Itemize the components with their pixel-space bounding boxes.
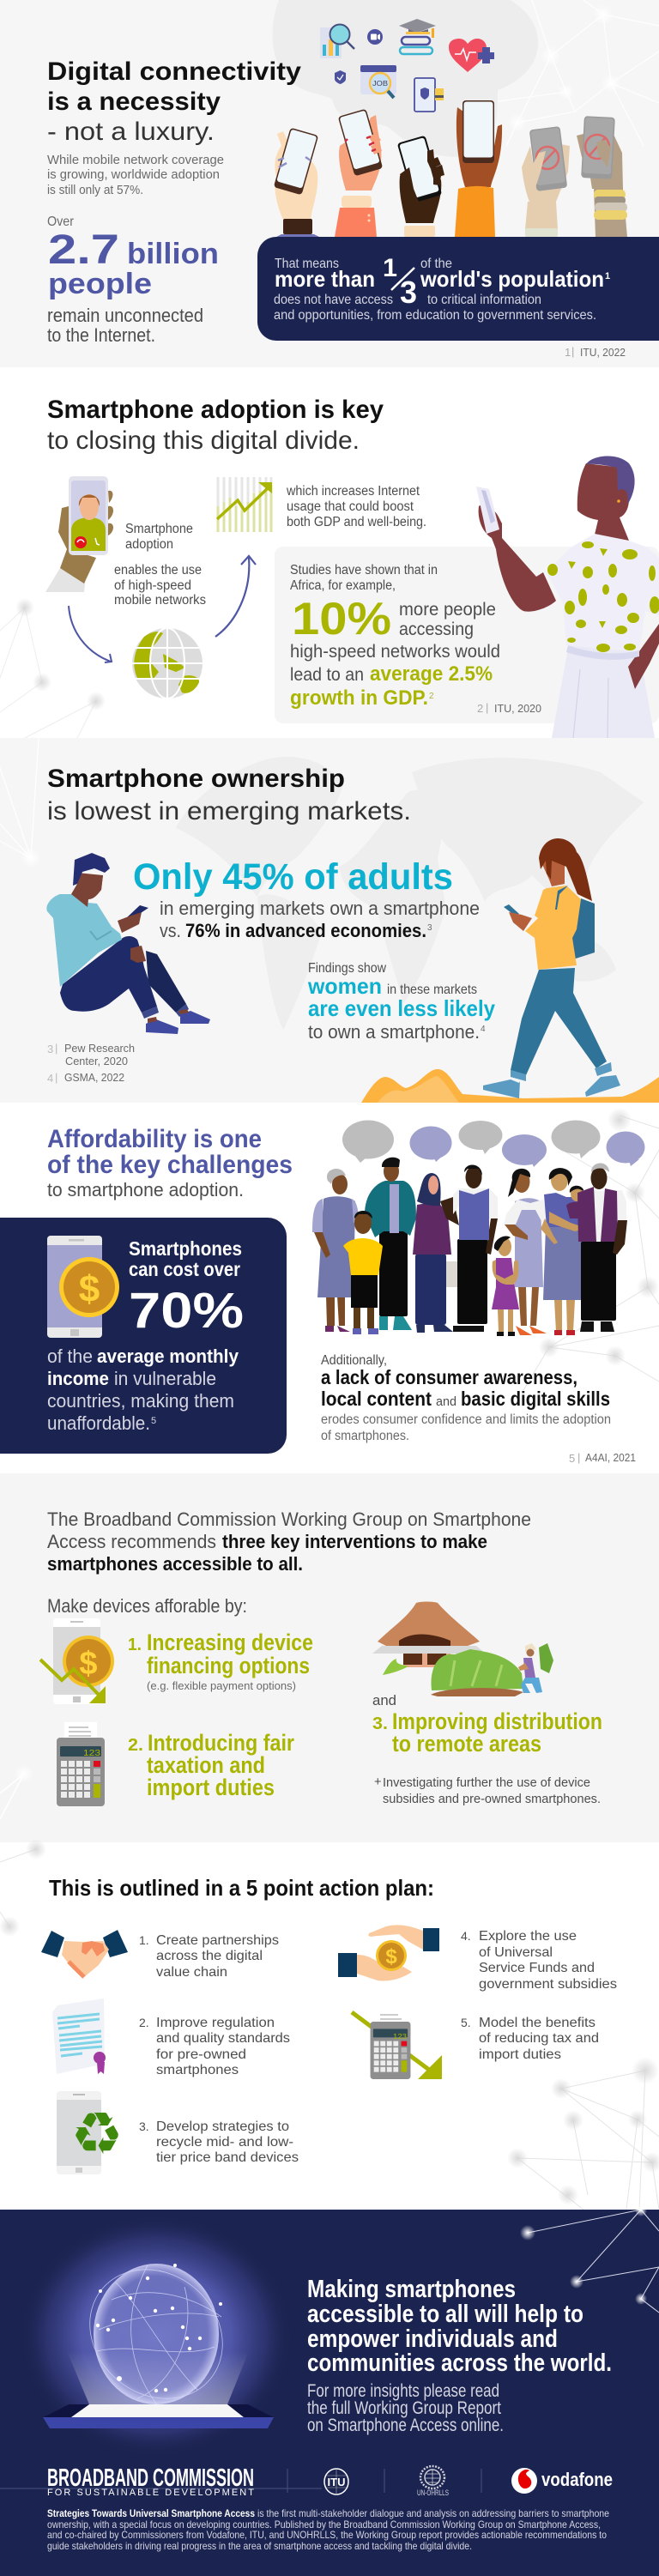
speech bubbles	[342, 1121, 645, 1167]
item: tax modelling: of reducing tax and	[479, 2031, 599, 2046]
callout: one third of the world: That means	[275, 257, 339, 271]
item 3: distribution	[372, 1692, 602, 1757]
item 1: device financing: financing options	[147, 1653, 310, 1678]
callout: one third of the world	[257, 237, 659, 341]
item 3: distribution: to remote areas	[392, 1731, 541, 1757]
source: A4AI 2021: |	[577, 1451, 580, 1464]
text: lack of awareness: of smartphones.	[321, 1429, 409, 1443]
icon: job search: JOB	[372, 79, 388, 88]
item: recycling: 3.	[139, 2119, 149, 2133]
text: emerging markets: vs.	[160, 920, 181, 941]
person: woman holding baby	[541, 1168, 592, 1335]
text: report description	[47, 2507, 609, 2552]
item: partnerships	[139, 1933, 279, 1980]
panel: studies in Africa: high-speed networks would	[290, 641, 500, 662]
stat: 2.7 billion people	[47, 215, 219, 346]
icon: books and graduation cap	[399, 19, 436, 54]
text: report description: is the first multi-stakeholder dialogue and analysis on addressing barriers to smartphone	[257, 2507, 609, 2519]
logo: UN-OHRLLS	[417, 2466, 449, 2497]
icon: chart magnifier	[320, 24, 354, 58]
text: more insights	[307, 2381, 504, 2435]
icon: shield	[335, 70, 346, 84]
icon: handshake	[41, 1930, 128, 1977]
text: smartphone adoption: Smartphone	[125, 522, 193, 536]
logo: Vodafone	[511, 2468, 613, 2494]
heading: affordability	[47, 1125, 293, 1200]
stat: only 45 percent: Only 45% of adults	[133, 856, 453, 898]
text: emerging markets	[160, 898, 480, 941]
heading: call to action: Making smartphones	[307, 2276, 516, 2303]
icon: phone coin down arrow	[40, 1618, 114, 1704]
panel: studies in Africa: |	[486, 701, 488, 714]
callout: 70 percent of income: can cost over	[129, 1258, 240, 1280]
sources: Pew and GSMA: Pew Research	[64, 1042, 135, 1055]
icon: globe	[132, 628, 203, 698]
heading: affordability: Affordability is one	[47, 1125, 262, 1153]
item 1: device financing: Increasing device	[147, 1630, 313, 1655]
item: partnerships: Create partnerships	[156, 1933, 279, 1948]
callout: 70 percent of income: Smartphones	[129, 1237, 242, 1260]
item: regulation	[139, 2016, 290, 2077]
item: recycling	[139, 2119, 299, 2165]
text: women less likely: to own a smartphone.	[308, 1021, 480, 1043]
sources: Pew and GSMA: Center, 2020	[65, 1055, 128, 1067]
text: women less likely: are even less likely	[308, 995, 495, 1021]
text: coverage: is growing, worldwide adoption	[47, 167, 220, 182]
item: tax modelling: 5.	[461, 2016, 471, 2029]
text: women less likely: 4	[481, 1025, 486, 1034]
logo: UN-OHRLLS: UN-OHRLLS	[417, 2488, 449, 2497]
person: blue vest man	[440, 1164, 498, 1332]
heading: affordability: of the key challenges	[47, 1151, 293, 1179]
stat: 10 percent: 10%	[292, 594, 391, 644]
heading: smartphone adoption	[47, 396, 384, 455]
item: tax modelling: import duties	[479, 2047, 561, 2062]
network lines	[0, 1774, 24, 1819]
text: women less likely: in these markets	[387, 983, 477, 997]
text: enables high-speed networks: mobile networks	[114, 593, 206, 608]
heading: digital connectivity: is a necessity	[47, 88, 221, 116]
callout: one third of the world: world's population	[420, 266, 604, 292]
panel: studies in Africa: ITU, 2020	[494, 702, 541, 715]
item: tax modelling: Model the benefits	[479, 2016, 596, 2030]
panel: three key interventions	[0, 1473, 659, 1842]
illustration: village hut and farmer	[372, 1601, 553, 1696]
item 2: fair taxation: Introducing fair	[148, 1730, 294, 1756]
callout: one third of the world: more than	[275, 266, 375, 292]
icon: job search	[360, 65, 396, 98]
arrow: globe to chart	[215, 556, 256, 637]
arrow: phone to globe	[69, 606, 112, 662]
text: smartphone adoption: adoption	[125, 537, 173, 552]
text: subsidies: subsidies and pre-owned smartphones.	[383, 1793, 601, 1806]
illustration: glowing globe over phone	[19, 2214, 293, 2458]
logo: Broadband Commission: BROADBAND COMMISSION	[47, 2464, 254, 2492]
text: enables high-speed networks: enables the use	[114, 563, 202, 577]
panel: smartphone ownership	[0, 738, 659, 1103]
icon: phone coin down arrow: $	[79, 1646, 98, 1682]
panel: smartphone adoption	[0, 367, 659, 751]
panel: affordability	[0, 1103, 659, 1473]
item: regulation: for pre-owned	[156, 2047, 246, 2062]
source: ITU 2022	[565, 345, 626, 359]
panel: studies in Africa: lead to an	[290, 664, 364, 685]
person: yellow shirt boy	[343, 1211, 383, 1334]
icon: phone with coin	[47, 1236, 119, 1338]
callout: 70 percent of income: income	[47, 1368, 109, 1389]
icon: phone video call in hand	[45, 476, 113, 592]
callout: 70 percent of income: countries, making them	[47, 1390, 234, 1412]
icon: calculator: 123	[83, 1749, 101, 1758]
callout: one third of the world: 3	[400, 275, 417, 310]
item: regulation: and quality standards	[156, 2031, 290, 2046]
network lines	[0, 1849, 659, 2210]
sources: Pew and GSMA: 3	[47, 1043, 53, 1055]
sources: Pew and GSMA: 4	[47, 1072, 53, 1085]
source: ITU 2022: 1	[565, 346, 571, 359]
text: lack of awareness: basic digital skills	[461, 1388, 610, 1410]
heading: digital connectivity	[47, 57, 301, 146]
text: internet usage: which increases Internet	[286, 484, 420, 499]
callout: 70 percent of income: of the	[47, 1345, 93, 1367]
logo: ITU: ITU	[328, 2476, 345, 2488]
illustration: walking woman	[483, 838, 620, 1098]
item 2: fair taxation: import duties	[147, 1775, 275, 1800]
callout: 70 percent of income	[0, 1218, 287, 1454]
callout: 70 percent of income: unaffordable.	[47, 1412, 150, 1434]
callout: 70 percent of income: 5	[151, 1416, 156, 1426]
heading: smartphone adoption: to closing this digital divide.	[47, 426, 360, 455]
stat: 2.7 billion people: people	[48, 268, 152, 300]
item 2: fair taxation	[128, 1730, 294, 1800]
speech bubble backdrop	[273, 0, 538, 157]
icon: calculator with down arrow: 123	[393, 2033, 408, 2041]
icon: heart with plus	[449, 39, 494, 72]
person: teal jacket man	[365, 1158, 416, 1330]
text: more insights: For more insights please read	[307, 2381, 499, 2401]
hand 4 with phone	[455, 100, 502, 237]
hand 2 with phone	[335, 109, 383, 237]
item: recycling: recycle mid- and low-	[156, 2135, 293, 2150]
person: grandmother	[312, 1169, 359, 1332]
item 3: distribution: Improving distribution	[392, 1708, 602, 1734]
text: subsidies	[374, 1775, 601, 1806]
item 3: distribution: and	[372, 1692, 396, 1708]
item 1: device financing	[128, 1630, 313, 1692]
stat: 2.7 billion people: 2.7	[48, 227, 119, 273]
text: internet usage: both GDP and well-being.	[287, 515, 426, 529]
stat: 2.7 billion people: billion	[127, 238, 219, 270]
network lines	[528, 2210, 659, 2313]
text: internet usage	[286, 484, 426, 529]
item: partnerships: 1.	[139, 1933, 149, 1947]
person: older man with vest	[577, 1164, 627, 1332]
icon: phone recycle	[57, 2091, 123, 2174]
item: partnerships: across the digital	[156, 1949, 263, 1963]
icon: hands with coin: $	[385, 1945, 397, 1968]
stat: 70 percent: 70%	[129, 1283, 244, 1339]
network lines	[498, 0, 659, 146]
text: enables high-speed networks	[114, 563, 206, 608]
panel: studies in Africa: 2	[429, 692, 434, 701]
text: emerging markets: in emerging markets own a smartphone	[160, 898, 480, 919]
heading: digital connectivity: Digital connectivity	[47, 57, 301, 86]
hand 3 with phone	[397, 136, 444, 237]
logo: Broadband Commission	[47, 2464, 254, 2498]
text: lack of awareness: and	[436, 1394, 456, 1409]
icon: calculator	[57, 1722, 105, 1806]
panel: digital connectivity	[0, 0, 659, 367]
item: universal service funds: 4.	[461, 1929, 471, 1943]
item: regulation: smartphones	[156, 2063, 239, 2077]
item: universal service funds: Explore the use	[479, 1929, 577, 1944]
text: working group recommendation: three key interventions to make	[222, 1531, 487, 1552]
logo: Vodafone: vodafone	[541, 2469, 613, 2490]
illustration: woman with phone	[476, 456, 659, 738]
illustration: community group	[312, 1158, 627, 1336]
hand 6 blocked phone with bracelets	[577, 116, 627, 237]
heading: smartphone ownership: Smartphone ownership	[47, 765, 345, 793]
hand 5 blocked phone	[522, 126, 570, 237]
illustration: mountains	[361, 1069, 659, 1103]
text: enables high-speed networks: of high-speed	[114, 578, 191, 593]
callout: one third of the world: 1	[605, 271, 610, 281]
stat: 2.7 billion people: Over	[47, 215, 75, 229]
text: working group recommendation: The Broadband Commission Working Group on Smartphone	[47, 1509, 531, 1530]
person: purple dress girl	[492, 1236, 519, 1336]
person: lavender dress woman	[504, 1169, 549, 1335]
heading: digital connectivity: - not a luxury.	[47, 118, 215, 146]
icon: phone recycle: ♻	[71, 2101, 123, 2168]
text: working group recommendation	[47, 1509, 531, 1575]
heading: smartphone adoption: Smartphone adoption is key	[47, 396, 384, 424]
panel: call to action footer	[0, 2204, 659, 2576]
heading: smartphone ownership	[47, 765, 411, 825]
text: lack of awareness: Additionally,	[321, 1353, 387, 1368]
item: universal service funds: government subsidies	[479, 1977, 617, 1992]
callout: one third of the world: and opportunities, from education to government services.	[274, 308, 596, 323]
text: report description: Strategies Towards Universal Smartphone Access	[47, 2507, 255, 2519]
text: smartphone adoption	[125, 522, 193, 552]
text: emerging markets: 3	[427, 923, 432, 933]
source: A4AI 2021: 5	[569, 1452, 575, 1465]
item: universal service funds: Service Funds and	[479, 1961, 595, 1975]
hand 1 with phone	[274, 128, 319, 237]
text: more insights: on Smartphone Access online.	[307, 2416, 504, 2435]
text: lack of awareness: local content	[321, 1388, 432, 1410]
icon: hands with coin	[338, 1925, 439, 1980]
text: internet usage: usage that could boost	[287, 499, 414, 514]
heading: affordability: to smartphone adoption.	[47, 1179, 244, 1200]
panel: studies in Africa: accessing	[399, 619, 474, 639]
item: tax modelling	[461, 2016, 599, 2062]
callout: one third of the world: 1	[383, 254, 397, 282]
panel: action plan	[0, 1839, 659, 2210]
source: ITU 2022: |	[571, 345, 574, 358]
heading: action plan: This is outlined in a 5 point action plan:	[49, 1875, 434, 1901]
icon: video call	[367, 29, 383, 45]
sources: Pew and GSMA: GSMA, 2022	[64, 1071, 124, 1084]
source: A4AI 2021	[569, 1451, 636, 1465]
panel: studies in Africa: Studies have shown that in	[290, 563, 438, 577]
text: coverage: While mobile network coverage	[47, 153, 224, 167]
text: lack of awareness: erodes consumer confidence and limits the adoption	[321, 1412, 611, 1427]
text: working group recommendation: Access recommends	[47, 1531, 216, 1552]
item: recycling: Develop strategies to	[156, 2119, 289, 2134]
sources: Pew and GSMA	[47, 1042, 135, 1085]
callout: one third of the world: to critical information	[427, 293, 541, 307]
heading: call to action: empower individuals and	[307, 2325, 558, 2353]
text: lack of awareness: a lack of consumer awareness,	[321, 1366, 577, 1388]
text: more insights: the full Working Group Report	[307, 2398, 501, 2418]
text: women less likely	[307, 961, 495, 1043]
panel: studies in Africa: growth in GDP.	[290, 686, 428, 710]
icon: phone with coin: $	[79, 1268, 100, 1310]
network lines	[0, 608, 96, 751]
network lines	[523, 1116, 659, 1390]
sources: Pew and GSMA: |	[55, 1071, 57, 1084]
item: partnerships: value chain	[156, 1965, 227, 1980]
text: women less likely: women	[307, 973, 382, 999]
icon: secure phone and card	[414, 78, 444, 112]
source: ITU 2022: ITU, 2022	[580, 346, 626, 359]
text: emerging markets: 76% in advanced economies.	[185, 920, 426, 941]
text: subsidies: +	[374, 1775, 381, 1789]
item 3: distribution: 3.	[372, 1714, 388, 1733]
logo: ITU	[324, 2469, 348, 2494]
logo: Broadband Commission: FOR SUSTAINABLE DEVELOPMENT	[47, 2488, 254, 2498]
person: hijab woman	[413, 1173, 457, 1333]
panel: studies in Africa	[275, 547, 659, 723]
callout: one third of the world: does not have access	[274, 293, 393, 307]
text: lack of awareness	[321, 1353, 611, 1443]
callout: 70 percent of income: average monthly	[97, 1345, 239, 1367]
panel: studies in Africa: average 2.5%	[370, 662, 493, 686]
world map background	[176, 757, 644, 1030]
callout: 70 percent of income: in vulnerable	[114, 1368, 216, 1389]
icon: growth chart	[217, 477, 272, 532]
item 1: device financing: (e.g. flexible payment options)	[147, 1679, 296, 1692]
item: universal service funds	[461, 1929, 617, 1992]
item 2: fair taxation: taxation and	[147, 1752, 265, 1778]
heading: call to action	[307, 2276, 612, 2377]
callout: one third of the world: of the	[420, 257, 452, 271]
icon: calculator with down arrow	[352, 2011, 442, 2079]
panel: studies in Africa: Africa, for example,	[290, 578, 396, 593]
item 1: device financing: 1.	[128, 1636, 142, 1654]
network lines	[0, 738, 39, 858]
heading: call to action: accessible to all will help to	[307, 2301, 583, 2328]
stat: 2.7 billion people: to the Internet.	[47, 324, 155, 346]
text: coverage	[47, 153, 224, 197]
stat: 2.7 billion people: remain unconnected	[47, 305, 203, 326]
text: working group recommendation: smartphones accessible to all.	[47, 1553, 303, 1575]
sources: Pew and GSMA: |	[55, 1042, 57, 1055]
item: universal service funds: of Universal	[479, 1945, 553, 1960]
text: subsidies: Investigating further the use of device	[383, 1776, 590, 1790]
panel: studies in Africa: more people	[399, 599, 496, 620]
text: make devices affordable: Make devices afforable by:	[47, 1595, 247, 1617]
text: women less likely: Findings show	[308, 961, 386, 976]
item: regulation: Improve regulation	[156, 2016, 275, 2030]
text: report description: guide stakeholders in driving real progress in the area of smartphone access and tackling the digital divide.	[47, 2540, 472, 2552]
heading: smartphone ownership: is lowest in emerging markets.	[47, 797, 411, 825]
item 2: fair taxation: 2.	[128, 1736, 143, 1755]
text: coverage: is still only at 57%.	[47, 183, 143, 197]
illustration: sitting man	[46, 853, 210, 1034]
panel: studies in Africa: 2	[477, 702, 483, 715]
item: recycling: tier price band devices	[156, 2150, 299, 2165]
icon: certificate document	[52, 1999, 106, 2074]
source: A4AI 2021: A4AI, 2021	[585, 1451, 636, 1464]
item: regulation: 2.	[139, 2016, 149, 2029]
